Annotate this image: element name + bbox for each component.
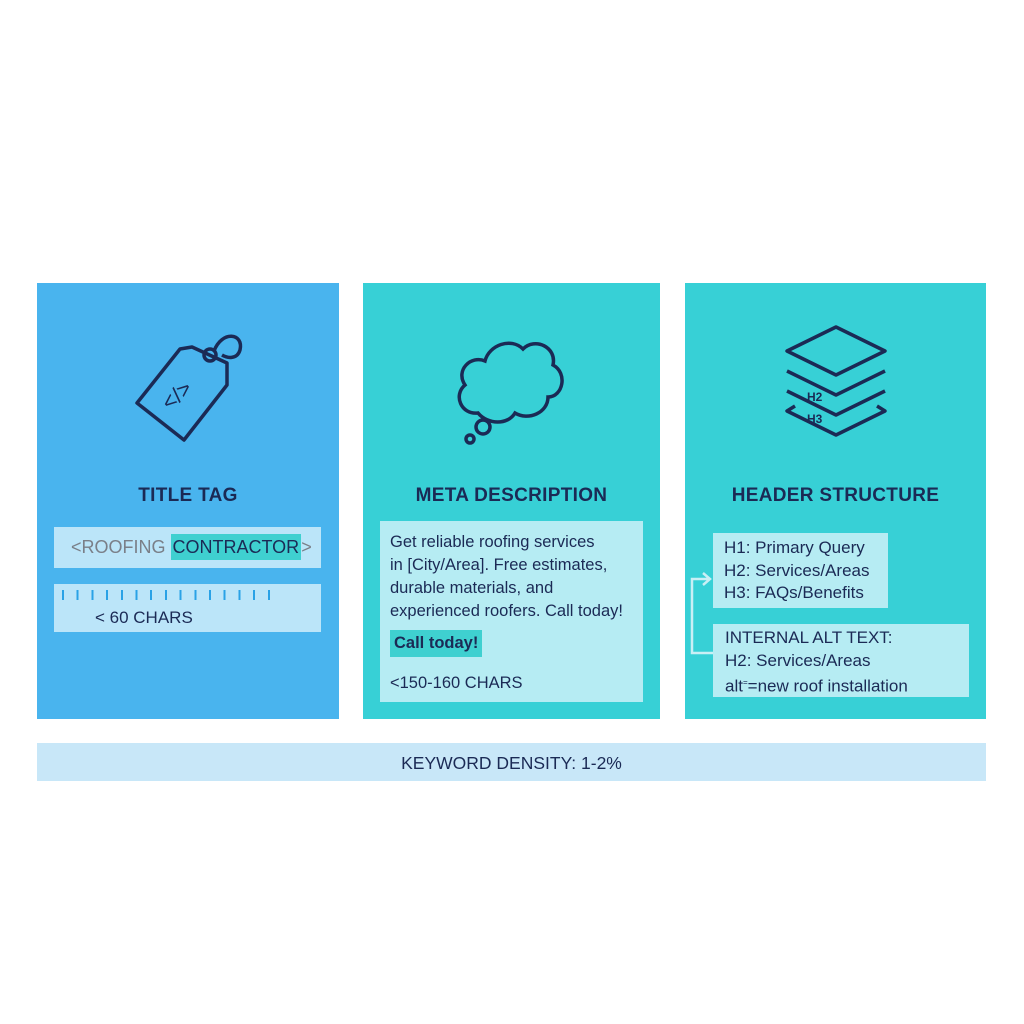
- char length box: < 60 CHARS: [95, 608, 193, 627]
- bottom bar: keyword density: [37, 743, 986, 781]
- description text box: Call today!: [394, 634, 478, 652]
- headings box: [713, 533, 888, 608]
- icon: thought cloud: [458, 342, 564, 445]
- headings box: H2: Services/Areas: [724, 560, 870, 580]
- alt text box: alt==new roof installation: [725, 677, 908, 696]
- heading: META DESCRIPTION: [416, 485, 607, 506]
- icon: tag: [135, 334, 242, 442]
- alt text box: H2: Services/Areas: [725, 650, 870, 670]
- bottom bar: keyword density: KEYWORD DENSITY: 1-2%: [401, 753, 622, 773]
- alt text box: [713, 624, 969, 697]
- icon: tag: </>: [157, 375, 197, 415]
- heading: HEADER STRUCTURE: [732, 485, 939, 506]
- description text box: in [City/Area]. Free estimates,: [390, 556, 607, 574]
- heading: TITLE TAG: [138, 485, 238, 506]
- description text box: experienced roofers. Call today!: [390, 602, 623, 620]
- headings box: H3: FAQs/Benefits: [724, 583, 864, 602]
- char length box: [54, 584, 321, 632]
- alt text box: INTERNAL ALT TEXT:: [725, 628, 893, 647]
- panel: meta description: [363, 283, 660, 719]
- title example box: <ROOFING CONTRACTOR>: [71, 537, 312, 557]
- icon: stacked layers: H3: [807, 412, 823, 426]
- icon: stacked layers: H2: [807, 390, 823, 404]
- description text box: [380, 521, 643, 702]
- panel: title tag: [37, 283, 339, 719]
- panel: header structure: [685, 283, 986, 719]
- headings box: H1: Primary Query: [724, 538, 865, 557]
- arrow: [690, 572, 713, 654]
- description text box: durable materials, and: [390, 579, 553, 597]
- icon: stacked layers: [785, 325, 887, 437]
- description text box: Get reliable roofing services: [390, 533, 595, 551]
- title example box: [54, 527, 321, 568]
- description text box: <150-160 CHARS: [390, 674, 523, 692]
